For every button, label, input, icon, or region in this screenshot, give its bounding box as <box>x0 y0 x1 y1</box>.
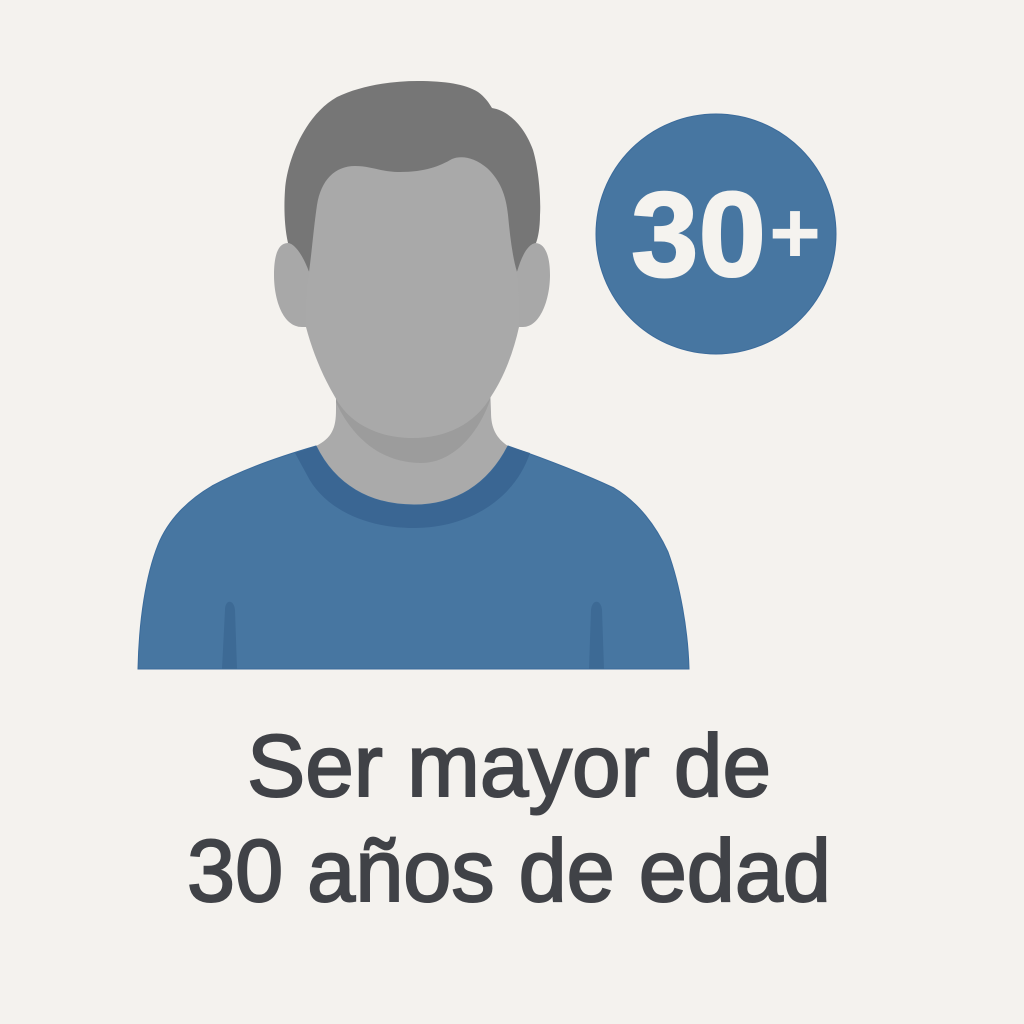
badge circle <box>596 114 836 354</box>
badge number: 30 <box>631 166 766 302</box>
icon: faceless man figure <box>138 81 689 669</box>
left ear <box>274 243 320 327</box>
neck <box>316 385 508 510</box>
neck shadow under chin <box>336 380 490 463</box>
badge: 30+ <box>596 114 836 354</box>
badge plus sign: + <box>769 183 821 282</box>
shirt <box>138 446 689 669</box>
caption line 1: Ser mayor de <box>247 716 771 815</box>
caption line 2: 30 años de edad <box>187 821 831 920</box>
left sleeve fold <box>222 602 237 669</box>
hair <box>284 81 540 300</box>
shirt collar <box>295 446 530 528</box>
right sleeve fold <box>589 602 604 669</box>
right ear <box>505 243 550 327</box>
face <box>306 157 519 438</box>
caption <box>187 716 831 920</box>
